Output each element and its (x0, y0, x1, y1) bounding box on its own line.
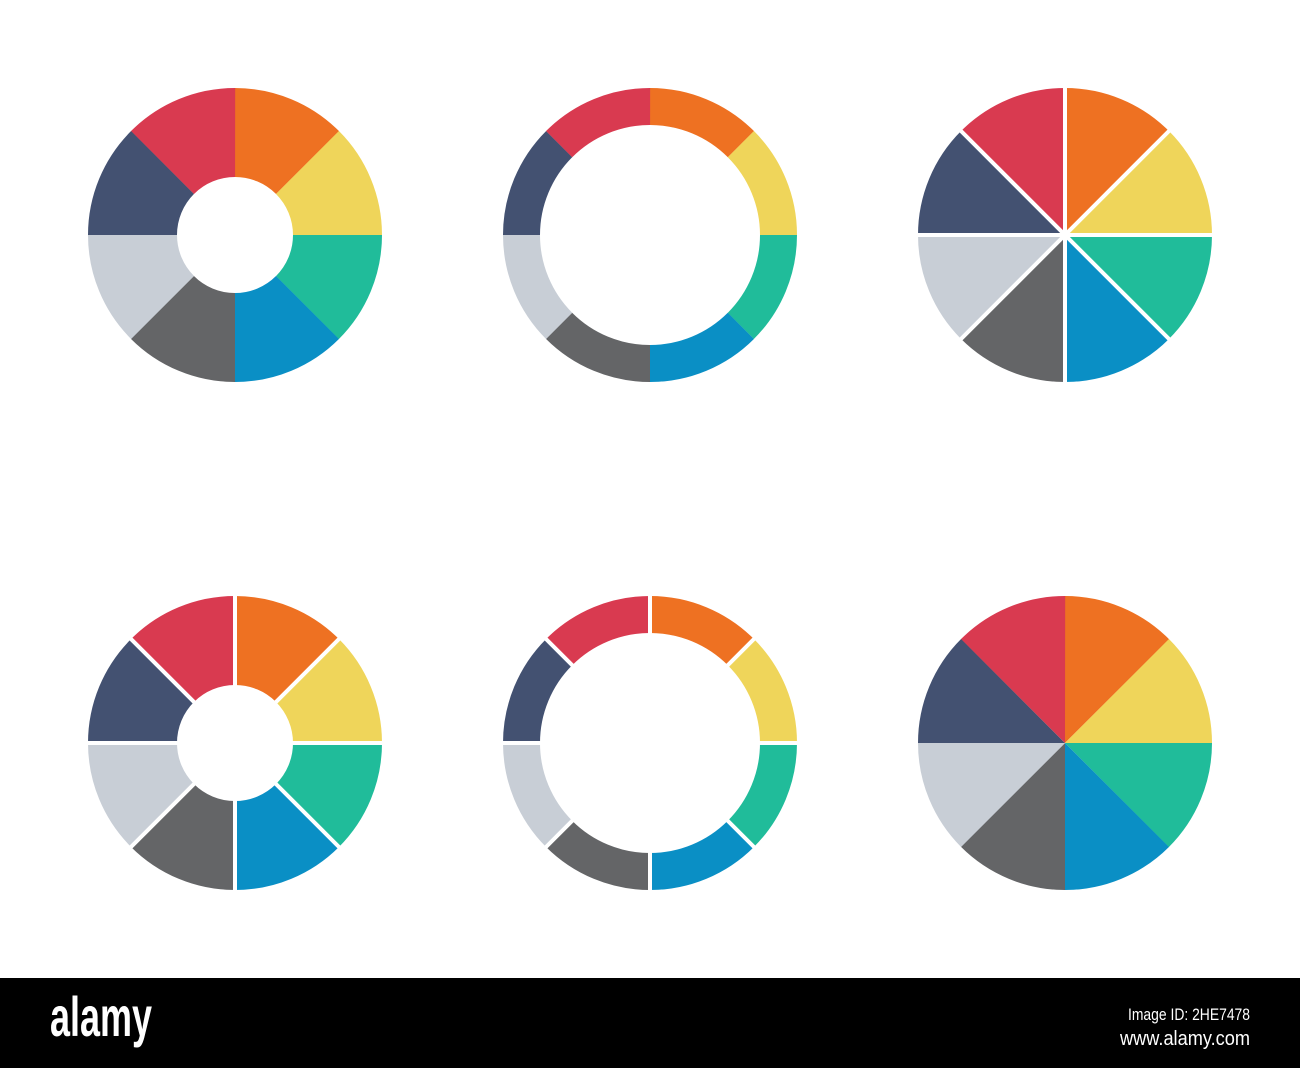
chart: pie with gaps (913, 83, 1217, 387)
footer banner: www.alamy.com (1119, 1028, 1250, 1050)
chart: thin ring with gaps (468, 561, 832, 925)
footer banner (0, 978, 1300, 1068)
footer banner: Image ID: 2HE7478 (1128, 1005, 1250, 1024)
chart: donut with gaps (83, 591, 387, 895)
chart: thin ring (468, 53, 832, 417)
footer banner: alamy (50, 985, 152, 1048)
chart: donut thick (90, 90, 380, 380)
chart: full pie (961, 639, 1169, 847)
